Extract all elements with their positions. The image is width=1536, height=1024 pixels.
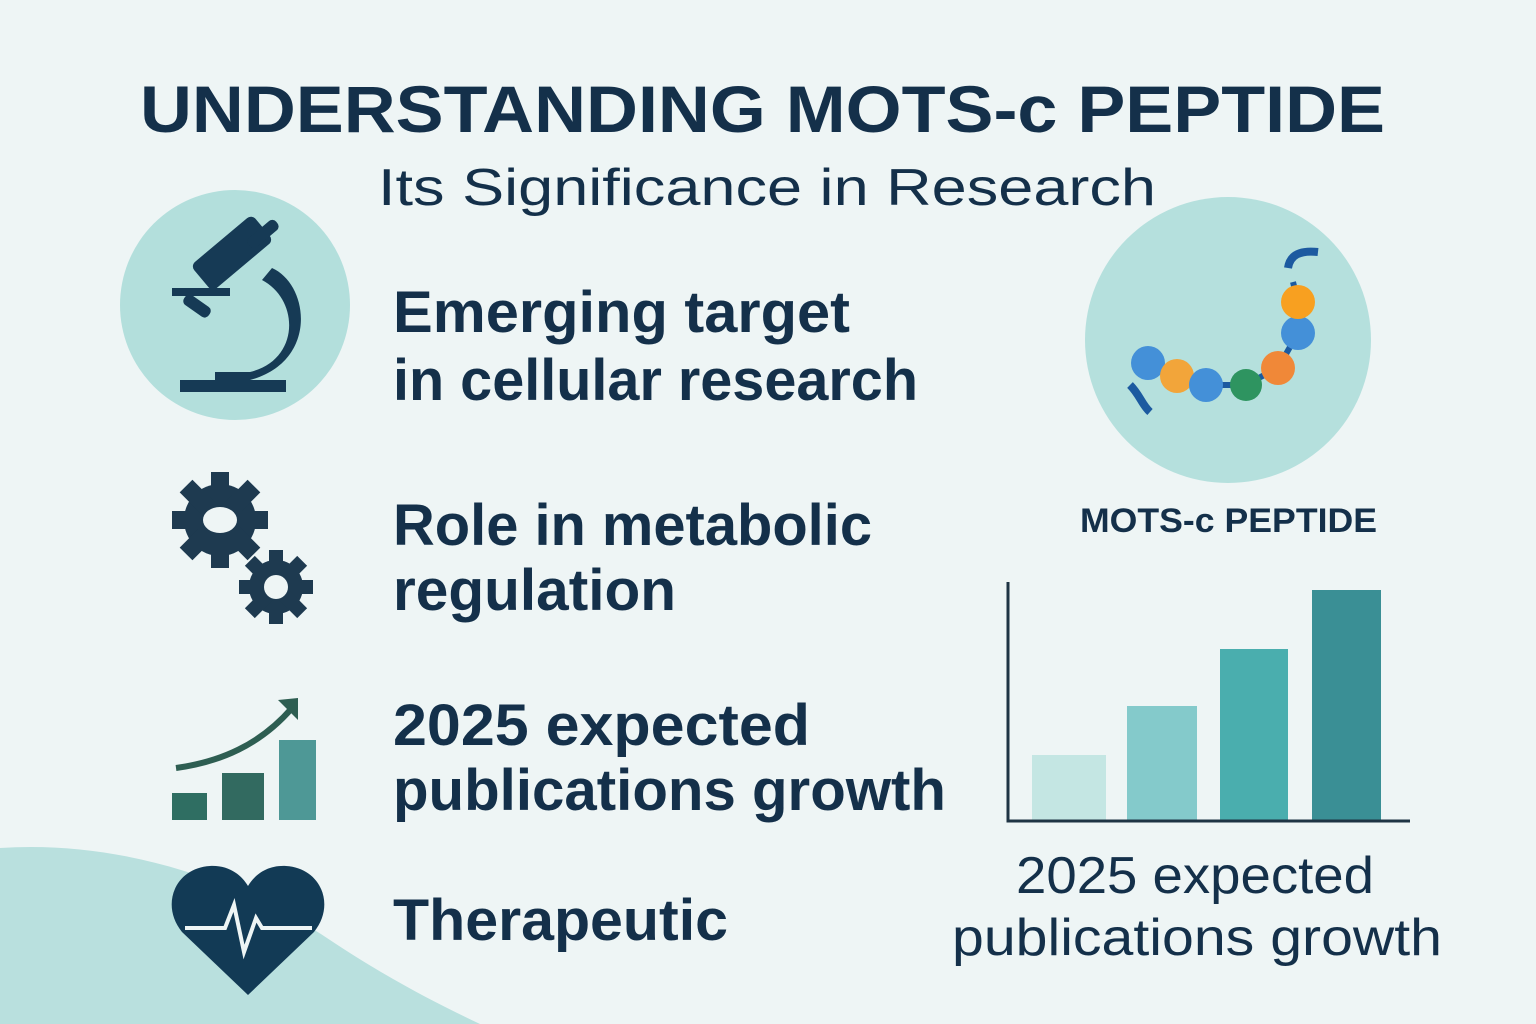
item 3 text: 2025 expected xyxy=(393,693,810,758)
icon: heart xyxy=(172,866,324,995)
item 3 text: publications growth xyxy=(393,758,946,823)
bar chart xyxy=(1008,582,1410,821)
subtitle: Its Significance in Research xyxy=(378,159,1156,217)
background wave xyxy=(0,847,480,1024)
chart caption: 2025 expected xyxy=(1016,847,1374,905)
icon: peptide chain xyxy=(1085,197,1371,483)
icon: growth chart xyxy=(172,698,316,820)
item 1 text xyxy=(393,280,918,413)
chart caption xyxy=(952,847,1442,967)
item 3 text xyxy=(393,693,946,823)
chart caption: publications growth xyxy=(952,909,1442,967)
item 1 text: in cellular research xyxy=(393,348,918,413)
item 2 text: regulation xyxy=(393,558,676,623)
icon: gears xyxy=(172,472,313,624)
item 2 text xyxy=(393,493,872,623)
item 1 text: Emerging target xyxy=(393,280,850,345)
title: UNDERSTANDING MOTS-c PEPTIDE xyxy=(140,72,1385,146)
icon: microscope xyxy=(120,190,350,420)
peptide label: MOTS-c PEPTIDE xyxy=(1080,502,1377,540)
item 2 text: Role in metabolic xyxy=(393,493,872,558)
item 4 text: Therapeutic xyxy=(393,888,728,953)
